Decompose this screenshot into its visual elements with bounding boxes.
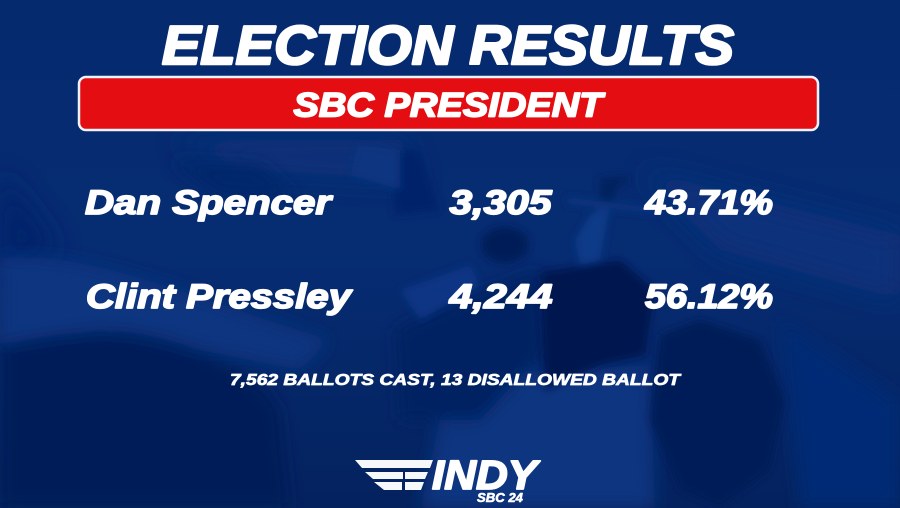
logo subtext: SBC 24 <box>477 490 524 505</box>
results row: Clint Pressley: 4,244 <box>448 278 553 316</box>
results row: Dan Spencer <box>85 184 773 222</box>
results row: Dan Spencer: 43.71% <box>644 184 773 222</box>
logo wordmark: INDY <box>432 452 541 498</box>
logo: INDY SBC 24 <box>355 452 541 505</box>
banner text: SBC PRESIDENT <box>294 86 606 124</box>
red banner <box>79 77 818 130</box>
ballot note: 7,562 BALLOTS CAST, 13 DISALLOWED BALLOT <box>230 372 682 389</box>
results row: Clint Pressley: Clint Pressley <box>86 278 353 316</box>
results row: Clint Pressley <box>86 278 773 316</box>
title: ELECTION RESULTS <box>162 14 734 76</box>
results row: Dan Spencer: Dan Spencer <box>85 184 333 222</box>
results row: Clint Pressley: 56.12% <box>645 278 773 316</box>
icon: wing <box>355 460 433 490</box>
results row: Dan Spencer: 3,305 <box>450 184 553 222</box>
